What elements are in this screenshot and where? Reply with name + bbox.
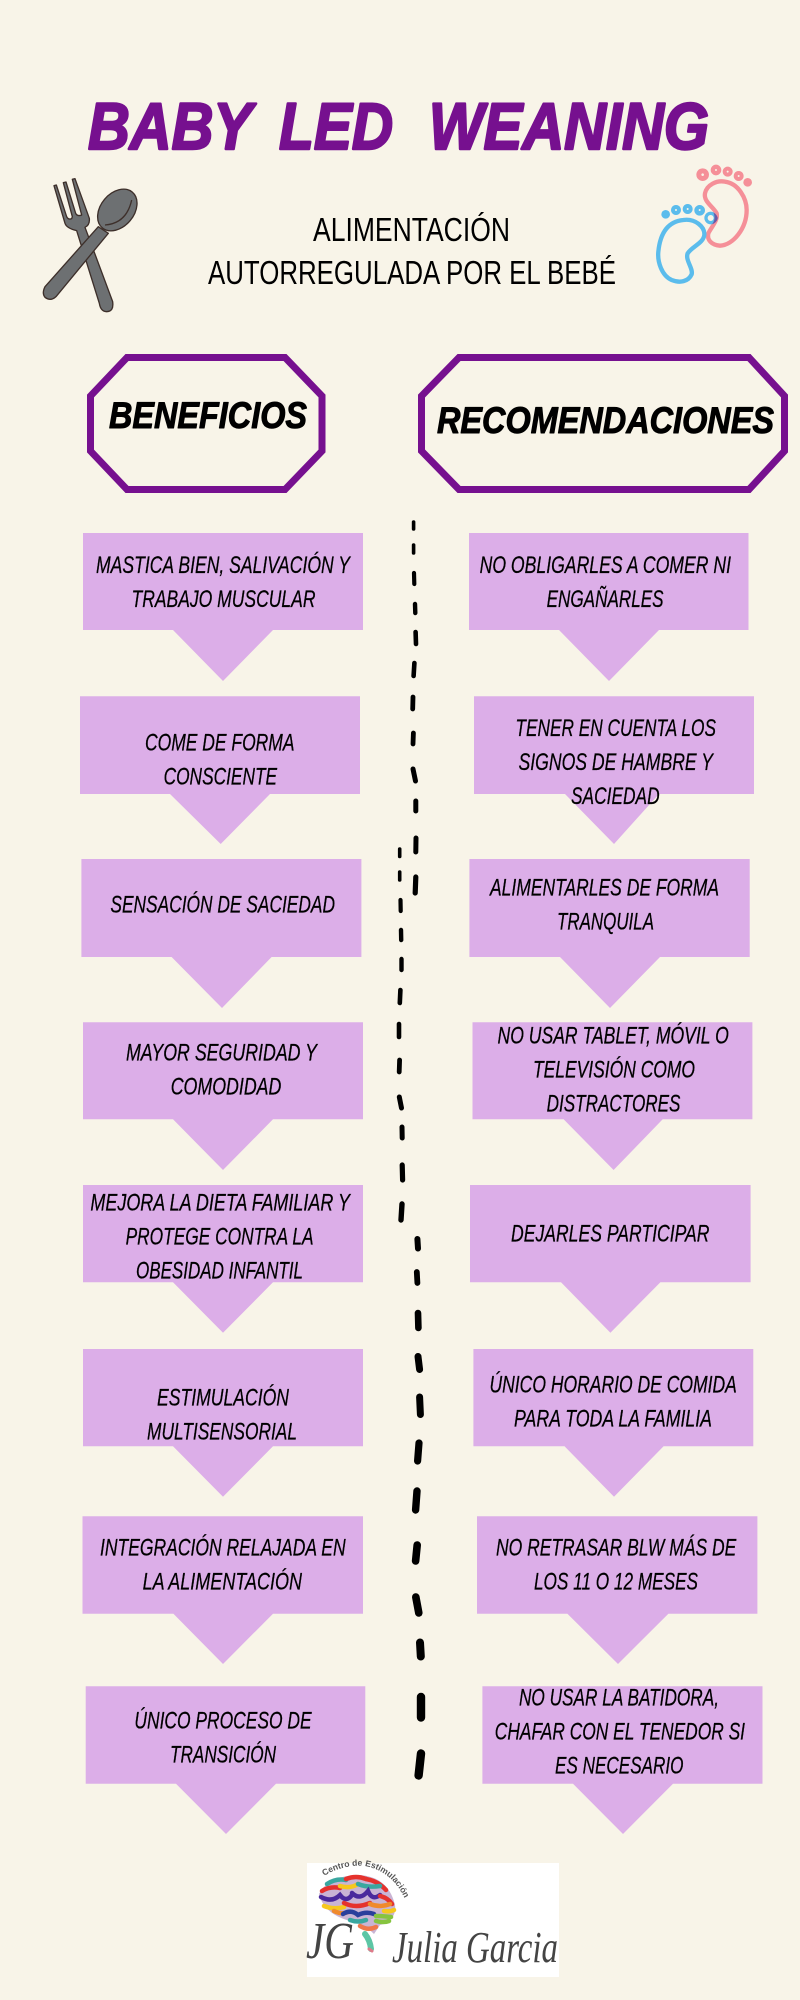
right box 7 [477, 1516, 757, 1664]
logo: Julia Garcia: Julia Garcia [392, 1923, 558, 1972]
subtitle: ALIMENTACIÓN [313, 211, 510, 248]
icon: baby footprints [658, 165, 752, 282]
title: BABY [88, 89, 256, 163]
left box 4 [83, 1022, 363, 1170]
heading: recomendaciones [422, 358, 784, 490]
dashed line: lower segment [416, 1239, 421, 1776]
left box 6 [83, 1349, 363, 1497]
left box 5 [83, 1185, 363, 1333]
right box 4: TELEVISIÓN COMO [533, 1057, 695, 1084]
left box 7 [82, 1516, 363, 1664]
right box 7: LOS 11 O 12 MESES [534, 1568, 698, 1595]
right box 5 [470, 1185, 751, 1333]
left box 6: MULTISENSORIAL [147, 1419, 297, 1446]
right box 3: TRANQUILA [557, 909, 654, 936]
left box 3 [81, 859, 361, 1008]
heading: beneficios: BENEFICIOS [109, 395, 307, 436]
left box 8 [86, 1686, 365, 1834]
right box 1 [469, 533, 748, 681]
left box 1 [83, 533, 363, 681]
left box 1: MASTICA BIEN, SALIVACIÓN Y [96, 552, 351, 579]
logo: Julia Garcia: JG [306, 1913, 354, 1970]
right box 6 [473, 1349, 753, 1497]
left box 6: ESTIMULACIÓN [157, 1385, 289, 1412]
left box 8: ÚNICO PROCESO DE [134, 1707, 312, 1734]
left box 2: COME DE FORMA [145, 730, 294, 757]
right box 3: ALIMENTARLES DE FORMA [489, 875, 719, 902]
dashed line: middle segment [399, 849, 403, 1220]
right box 4: DISTRACTORES [547, 1091, 680, 1118]
left box 3: SENSACIÓN DE SACIEDAD [110, 892, 335, 919]
left box 5: MEJORA LA DIETA FAMILIAR Y [90, 1190, 351, 1217]
logo: Julia Garcia: Centro de Estimulación [322, 1860, 408, 1898]
right box 5: DEJARLES PARTICIPAR [511, 1221, 710, 1248]
right box 8: NO USAR LA BATIDORA, [519, 1685, 719, 1712]
title: WEANING [429, 89, 709, 163]
right box 8 [482, 1685, 762, 1834]
left box 2: CONSCIENTE [164, 764, 278, 791]
dashed line: upper segment [413, 522, 416, 893]
left box 4: MAYOR SEGURIDAD Y [126, 1040, 318, 1067]
right box 3 [469, 859, 750, 1008]
right box 1: ENGAÑARLES [547, 586, 664, 613]
left box 4: COMODIDAD [171, 1074, 281, 1101]
logo: Julia Garcia [306, 1860, 559, 1977]
right box 2 [474, 696, 754, 844]
left box 7: LA ALIMENTACIÓN [143, 1568, 303, 1595]
left box 2 [80, 696, 360, 844]
right box 2: SACIEDAD [571, 783, 660, 810]
left box 1: TRABAJO MUSCULAR [132, 586, 316, 613]
right box 6: PARA TODA LA FAMILIA [514, 1406, 712, 1433]
heading: beneficios [90, 358, 322, 490]
title [88, 89, 709, 163]
right box 2: SIGNOS DE HAMBRE Y [518, 749, 714, 776]
right box 2: TENER EN CUENTA LOS [515, 715, 716, 742]
left box 5: PROTEGE CONTRA LA [126, 1224, 314, 1251]
subtitle [208, 211, 616, 291]
right box 8: ES NECESARIO [555, 1753, 684, 1780]
left box 5: OBESIDAD INFANTIL [136, 1258, 303, 1285]
title: LED [279, 89, 393, 163]
icon: fork and spoon [43, 179, 145, 312]
left box 8: TRANSICIÓN [170, 1742, 276, 1769]
icon: colourful brain [319, 1875, 395, 1951]
right box 4 [472, 1022, 752, 1170]
subtitle: AUTORREGULADA POR EL BEBÉ [208, 254, 616, 291]
left box 7: INTEGRACIÓN RELAJADA EN [100, 1534, 346, 1561]
